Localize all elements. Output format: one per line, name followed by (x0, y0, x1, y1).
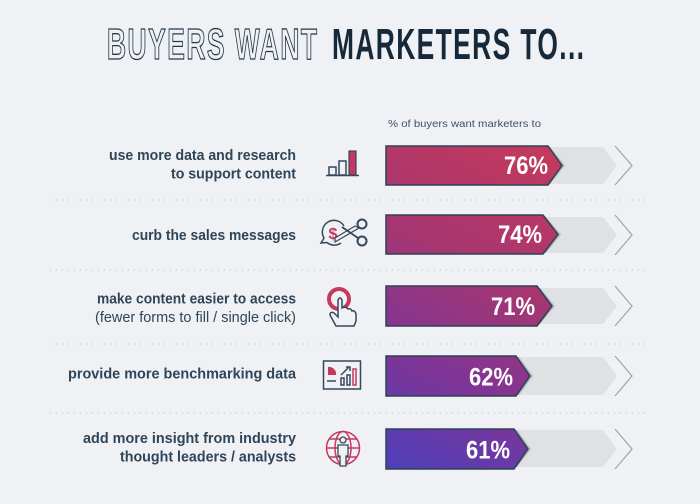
bar 74% (386, 215, 558, 254)
label (95, 290, 296, 326)
bar track (545, 147, 617, 184)
bar shadow (513, 430, 531, 467)
label: provide more benchmarking data (68, 366, 297, 382)
label: to support content (171, 166, 296, 182)
chart heading: % of buyers want marketers to (388, 118, 541, 130)
value: 71% (491, 293, 535, 321)
row 2: curb sales (132, 215, 632, 255)
row 1: more data (109, 146, 632, 185)
bar shadow (542, 217, 561, 253)
label: make content easier to access (97, 290, 296, 308)
bar 61% (386, 429, 528, 469)
row 5: insight (83, 429, 632, 469)
label: use more data and research (109, 147, 296, 164)
arrow (615, 146, 632, 185)
icon: presentation board (324, 361, 360, 389)
arrow (615, 429, 632, 469)
bar shadow (515, 357, 533, 395)
bar 76% (386, 146, 562, 185)
row 4: benchmarking (68, 356, 632, 396)
arrow (615, 286, 632, 326)
bar 71% (386, 286, 552, 326)
title: BUYERS WANT (107, 19, 317, 69)
label (83, 430, 297, 466)
label: thought leaders / analysts (120, 448, 296, 466)
label: add more insight from industry (83, 430, 297, 447)
dollar sign: $ (329, 226, 338, 243)
value: 74% (498, 221, 542, 249)
bar track (510, 430, 617, 467)
icon: bar chart (326, 151, 359, 176)
bar shadow (546, 147, 565, 184)
value: 76% (504, 152, 548, 180)
row 3: easier access (95, 286, 632, 326)
label: (fewer forms to fill / single click) (95, 309, 296, 326)
label: curb the sales messages (132, 227, 296, 244)
icon: globe and person (326, 432, 360, 466)
icon: click hand (329, 289, 356, 326)
icon: speech bubble and scissors (321, 220, 366, 246)
bar 62% (386, 356, 530, 396)
value: 62% (469, 364, 513, 392)
bar track (540, 217, 617, 253)
arrow (615, 356, 632, 396)
arrow (615, 215, 632, 255)
bar shadow (536, 288, 555, 324)
bar track (530, 288, 617, 324)
value: 61% (466, 436, 510, 464)
bar track (510, 357, 617, 395)
label (109, 147, 296, 182)
title (107, 19, 584, 69)
title: MARKETERS TO... (332, 19, 584, 69)
